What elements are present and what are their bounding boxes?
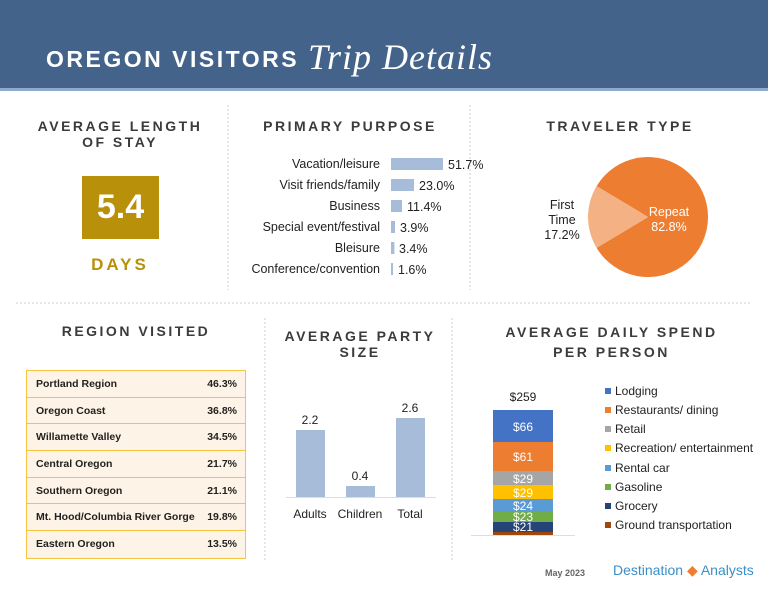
bar chart: party size: Total bbox=[397, 507, 423, 521]
table: regions: Portland Region bbox=[36, 378, 117, 390]
heading bbox=[284, 328, 436, 360]
panel: average daily spend bbox=[471, 324, 754, 578]
legend: Retail bbox=[615, 422, 646, 436]
bar chart: purpose: Business bbox=[329, 199, 380, 213]
table: regions bbox=[26, 370, 246, 559]
legend bbox=[605, 384, 754, 532]
header banner bbox=[0, 0, 768, 91]
table: regions: Southern Oregon bbox=[36, 485, 122, 497]
table: regions: Willamette Valley bbox=[36, 431, 121, 443]
heading: PER PERSON bbox=[553, 344, 670, 360]
heading: OF STAY bbox=[82, 134, 158, 150]
value box bbox=[82, 176, 159, 239]
heading: TRAVELER TYPE bbox=[546, 118, 694, 134]
heading bbox=[38, 118, 202, 150]
value box: 5.4 bbox=[97, 188, 144, 226]
bar chart: purpose: Special event/festival bbox=[263, 220, 380, 234]
title: OREGON VISITORS Trip Details bbox=[46, 37, 493, 77]
heading: SIZE bbox=[339, 344, 381, 360]
bar chart: party size: 2.2 bbox=[302, 413, 319, 427]
table: regions: Eastern Oregon bbox=[36, 538, 115, 550]
bar chart: purpose: Vacation/leisure bbox=[292, 157, 380, 171]
bar chart: purpose: 11.4% bbox=[407, 200, 442, 214]
table: regions: 36.8% bbox=[207, 405, 237, 417]
bar chart: purpose: 3.4% bbox=[399, 242, 428, 256]
heading: PRIMARY PURPOSE bbox=[263, 118, 437, 134]
stacked bar: $21 bbox=[513, 520, 533, 534]
table: regions: 21.1% bbox=[207, 485, 237, 497]
stacked bar: $23 bbox=[513, 510, 533, 524]
bar chart: purpose: 1.6% bbox=[398, 263, 426, 277]
pie chart: First bbox=[550, 198, 575, 212]
pie chart: Repeat bbox=[649, 205, 690, 219]
bar chart: purpose: Visit friends/family bbox=[280, 178, 381, 192]
panel: average party size bbox=[284, 328, 436, 521]
heading bbox=[505, 324, 718, 360]
bar chart: purpose: 51.7% bbox=[448, 158, 483, 172]
table: regions: Oregon Coast bbox=[36, 405, 105, 417]
table: regions: Mt. Hood/Columbia River Gorge bbox=[36, 511, 195, 523]
bar chart: party size bbox=[286, 401, 436, 521]
legend: Recreation/ entertainment bbox=[615, 441, 754, 455]
pie chart: Time bbox=[548, 213, 576, 227]
bar chart: purpose: Conference/convention bbox=[251, 262, 380, 276]
stacked bar: $29 bbox=[513, 472, 533, 486]
panel: traveler type bbox=[544, 118, 708, 277]
panel: region visited bbox=[26, 323, 246, 559]
bar chart: party size: Children bbox=[338, 507, 382, 521]
pie chart bbox=[544, 157, 708, 277]
legend: Ground transportation bbox=[615, 518, 732, 532]
table: regions: 34.5% bbox=[207, 431, 237, 443]
stacked bar: $24 bbox=[513, 499, 533, 513]
table: regions: 19.8% bbox=[207, 511, 237, 523]
bar chart: purpose: 23.0% bbox=[419, 179, 454, 193]
panel: primary purpose bbox=[251, 118, 484, 277]
stacked bar: $29 bbox=[513, 486, 533, 500]
legend: Rental car bbox=[615, 461, 670, 475]
pie chart: 17.2% bbox=[544, 228, 580, 242]
stacked bar: $61 bbox=[513, 450, 533, 464]
legend: Gasoline bbox=[615, 480, 663, 494]
bar chart: party size: Adults bbox=[293, 507, 327, 521]
bar chart: party size: 0.4 bbox=[352, 469, 369, 483]
bar chart: purpose: 3.9% bbox=[400, 221, 428, 235]
bar chart: purpose: Bleisure bbox=[335, 241, 380, 255]
table: regions: 13.5% bbox=[207, 538, 237, 550]
pie chart: 82.8% bbox=[651, 220, 687, 234]
stacked bar bbox=[471, 390, 575, 536]
legend: Restaurants/ dining bbox=[615, 403, 718, 417]
legend: Lodging bbox=[615, 384, 658, 398]
heading: AVERAGE DAILY SPEND bbox=[505, 324, 718, 340]
heading: AVERAGE LENGTH bbox=[38, 118, 202, 134]
table: regions: 21.7% bbox=[207, 458, 237, 470]
table: regions: 46.3% bbox=[207, 378, 237, 390]
heading: AVERAGE PARTY bbox=[284, 328, 436, 344]
days label: DAYS bbox=[91, 255, 149, 274]
heading: REGION VISITED bbox=[62, 323, 210, 339]
stacked bar: $66 bbox=[513, 420, 533, 434]
stacked bar: $259 bbox=[510, 390, 537, 404]
date: May 2023 bbox=[545, 568, 585, 578]
bar chart: party size: 2.6 bbox=[402, 401, 419, 415]
legend: Grocery bbox=[615, 499, 658, 513]
bar chart: purpose bbox=[251, 157, 484, 277]
table: regions: Central Oregon bbox=[36, 458, 112, 470]
panel: average length of stay bbox=[38, 118, 202, 274]
logo: Destination ◆ Analysts bbox=[613, 562, 754, 578]
